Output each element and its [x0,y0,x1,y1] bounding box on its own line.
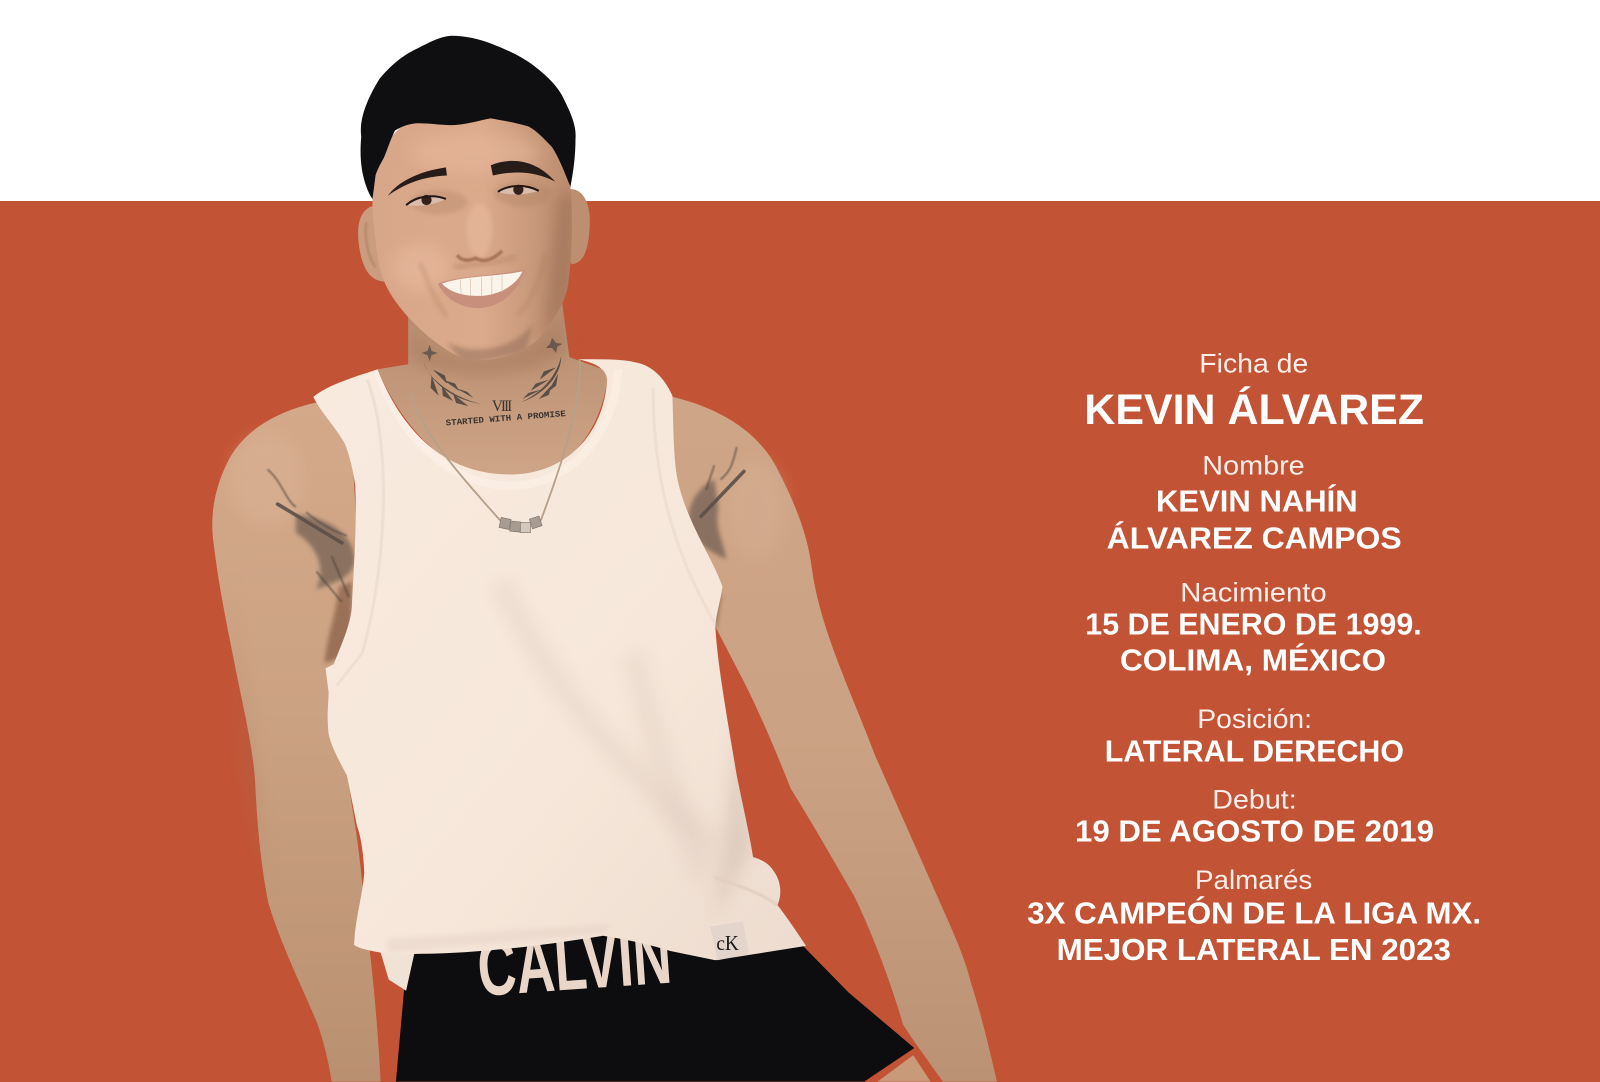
info sheet [1027,348,1481,967]
right arm [668,396,997,1082]
field: debut: 19 DE AGOSTO DE 2019 [1075,814,1434,849]
field: debut [1075,785,1434,849]
tattoo: roman numeral: VIII [492,398,512,415]
field: palmarés: Palmarés [1195,865,1312,895]
necklace [411,359,580,533]
CK label: cK [716,931,739,955]
tank: lower left panel under hem [380,949,415,991]
hair [361,36,576,199]
field: palmarés: MEJOR LATERAL EN 2023 [1057,932,1451,967]
field: nombre [1107,450,1402,556]
eyes [406,185,539,206]
neck and chest [378,296,608,480]
background: white top band [0,0,1600,201]
mouth [438,269,524,308]
tattoo: right arm bat [688,447,744,559]
necklace beads [499,516,542,533]
left arm [212,402,381,1082]
heading: name: KEVIN ÁLVAREZ [1084,386,1424,434]
CK label [710,921,749,960]
field: nacimiento: 15 DE ENERO DE 1999. [1085,606,1422,641]
field: nombre: KEVIN NAHÍN [1156,484,1358,519]
tattoo: neck text: STARTED WITH A PROMISE [445,409,566,428]
right thigh sliver [878,1055,931,1082]
field: posición [1105,704,1404,768]
tank: fold shadows [502,590,656,798]
face [372,110,572,360]
field: palmarés: 3X CAMPEÓN DE LA LIGA MX. [1027,894,1481,930]
field: nombre: ÁLVAREZ CAMPOS [1107,521,1402,556]
tank: collar [374,370,426,444]
field: nacimiento: COLIMA, MÉXICO [1120,643,1386,678]
portrait figure of Kevin Álvarez [212,36,997,1082]
tattoo: left arm bat [267,469,355,602]
field: nacimiento: Nacimiento [1180,578,1327,608]
tattoos: neck [421,338,566,428]
eyebrows [388,161,555,196]
underarm shadow [324,582,352,663]
waistband lettering: CALVIN [475,912,674,1013]
field: palmarés [1027,865,1481,967]
face shading [392,133,576,365]
tattoo: leaves right [521,356,561,402]
tattoo: stars [421,338,562,361]
field: posición: Posición: [1197,704,1312,734]
tattoo: leaves left [423,362,482,406]
shorts [396,931,914,1082]
ears [358,189,590,282]
field: nombre: Nombre [1202,450,1305,480]
field: nacimiento [1085,578,1422,678]
field: debut: Debut: [1212,785,1297,815]
tank top [306,352,816,964]
field: posición: LATERAL DERECHO [1105,733,1404,768]
heading: ficha de: Ficha de [1199,348,1308,378]
